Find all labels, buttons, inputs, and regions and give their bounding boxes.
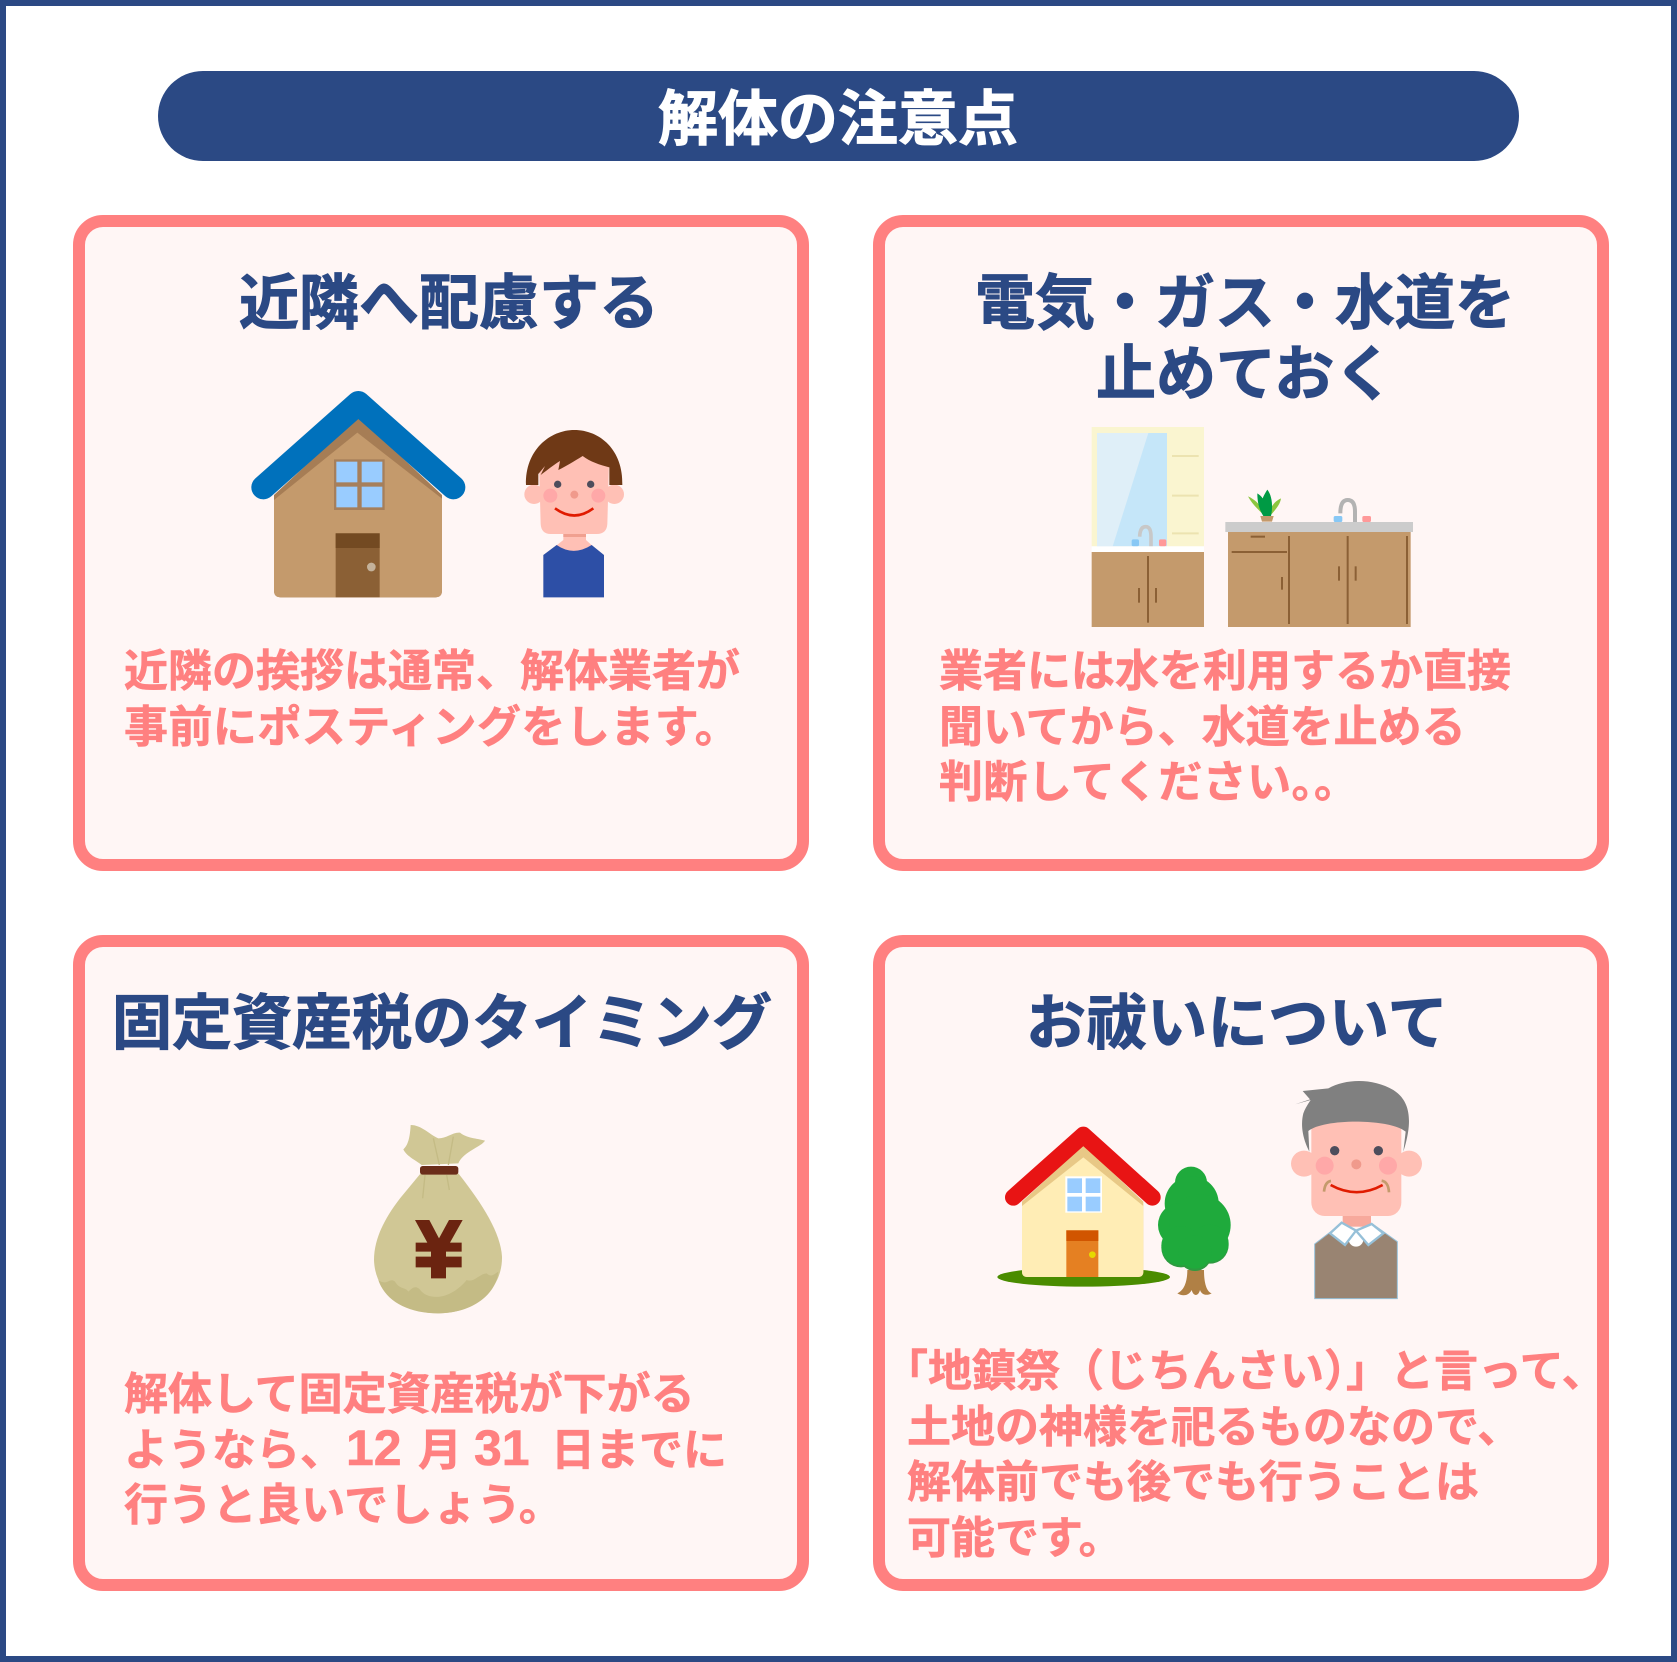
heading: utilities: 止めておく bbox=[1096, 341, 1394, 408]
body text: utilities: 聞いてから、水道を止める bbox=[939, 702, 1466, 752]
body text: neighbours bbox=[124, 647, 740, 752]
icon: tree bbox=[1158, 1167, 1231, 1295]
body text: property tax: 12 bbox=[346, 1420, 402, 1476]
body text: property tax bbox=[124, 1370, 727, 1530]
icon: kitchen counter bbox=[1225, 490, 1413, 627]
title banner bbox=[158, 71, 1519, 161]
body text: property tax: 行うと良いでしょう。 bbox=[124, 1481, 563, 1530]
body text: utilities: 業者には水を利用するか直接 bbox=[939, 647, 1511, 696]
body text: neighbours: 事前にポスティングをします。 bbox=[124, 702, 739, 752]
illustration: house and boy bbox=[251, 391, 624, 598]
panel: utilities bbox=[873, 215, 1609, 871]
panel: property tax bbox=[73, 935, 809, 1591]
body text: purification ritual: 可能です。 bbox=[907, 1514, 1123, 1562]
panel: purification ritual bbox=[873, 935, 1609, 1591]
heading: utilities: 電気・ガス・水道を bbox=[975, 270, 1515, 337]
body text: property tax: 31 bbox=[474, 1420, 530, 1476]
illustration: washstand and kitchen bbox=[1092, 427, 1413, 627]
heading: property tax: 固定資産税のタイミング bbox=[112, 990, 772, 1057]
body text: utilities: 判断してください。。 bbox=[939, 758, 1358, 807]
heading: neighbours: 近隣へ配慮する bbox=[239, 270, 659, 337]
body text: property tax: ようなら、 月 日までに bbox=[124, 1426, 727, 1474]
panel: neighbours bbox=[73, 215, 809, 871]
body text: purification ritual bbox=[884, 1347, 1606, 1562]
title: 解体の注意点 bbox=[658, 86, 1018, 153]
illustration: house, tree and elder bbox=[997, 1081, 1422, 1300]
body text: property tax: 解体して固定資産税が下がる bbox=[124, 1370, 695, 1419]
heading: utilities bbox=[975, 270, 1515, 408]
body text: utilities bbox=[939, 647, 1511, 807]
icon: money bag bbox=[374, 1125, 502, 1314]
icon: boy bbox=[524, 430, 624, 597]
icon: brown house bbox=[263, 403, 453, 597]
icon: elder man bbox=[1291, 1081, 1422, 1299]
body text: purification ritual: 「地鎮祭（じちんさい）」と言って、 bbox=[884, 1347, 1606, 1396]
body text: purification ritual: 土地の神様を祀るものなので、 bbox=[907, 1402, 1521, 1452]
heading: purification ritual: お祓いについて bbox=[1026, 990, 1448, 1057]
body text: purification ritual: 解体前でも後でも行うことは bbox=[907, 1458, 1479, 1507]
icon: yellow house bbox=[997, 1135, 1170, 1287]
icon: washstand bbox=[1092, 427, 1204, 627]
body text: neighbours: 近隣の挨拶は通常、解体業者が bbox=[124, 647, 740, 696]
